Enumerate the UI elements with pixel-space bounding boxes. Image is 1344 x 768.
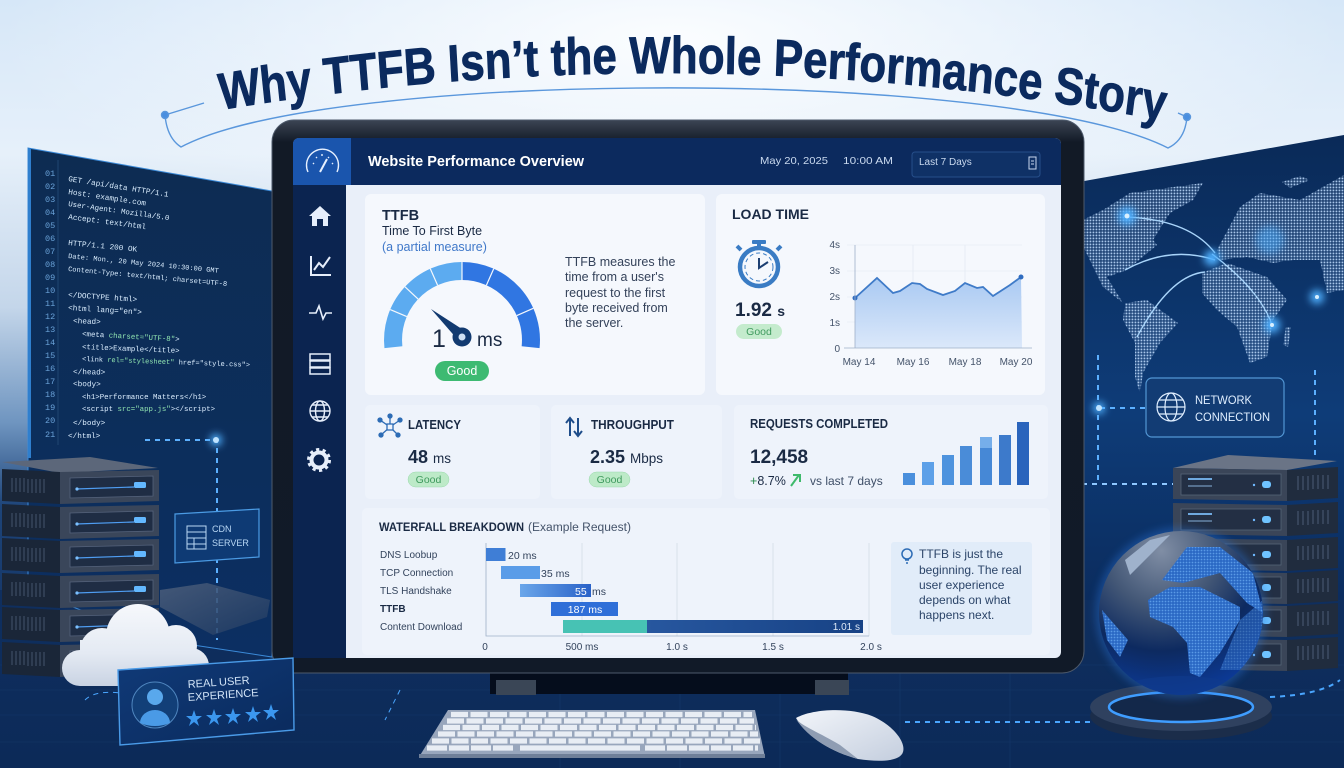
code text: User-Agent: Mozilla/5.0 — [68, 201, 170, 223]
line numbers: 19 — [45, 403, 55, 413]
line numbers: 17 — [45, 377, 55, 387]
floor with grid — [0, 590, 1344, 768]
panel: network map wall — [1073, 135, 1344, 600]
line numbers: 09 — [45, 273, 55, 283]
line numbers: 11 — [45, 299, 55, 309]
label: CDN server — [175, 509, 259, 563]
label: network connection: NETWORK — [1195, 393, 1252, 407]
area chart: 1s — [829, 318, 840, 329]
callout: depends on what — [919, 593, 1011, 607]
line numbers: 10 — [45, 286, 55, 296]
line numbers: 16 — [45, 364, 55, 374]
status pill — [435, 361, 489, 381]
area chart: 0 — [834, 344, 840, 355]
description: TTFB measures the — [565, 255, 675, 269]
area chart: 3s — [829, 266, 840, 277]
callout: user experience — [919, 578, 1005, 592]
code text: </body> — [73, 420, 106, 428]
card: real user experience: REAL USER — [187, 675, 250, 691]
icon: left server stack — [2, 457, 159, 677]
status pill — [589, 472, 630, 487]
status pill: Good — [597, 474, 623, 486]
code text: <script src="app.js"></script> — [82, 406, 216, 414]
panel: TTFB: Time To First Byte — [382, 224, 482, 238]
icon: up and down arrows — [566, 418, 582, 436]
line numbers: 18 — [45, 390, 55, 400]
card: real user experience — [118, 658, 294, 745]
area chart: May 20 — [1000, 357, 1033, 368]
row labels: TTFB — [380, 604, 406, 615]
line numbers: 12 — [45, 312, 55, 322]
line numbers: 05 — [45, 221, 55, 231]
date range selector: Last 7 Days — [919, 157, 972, 168]
network arcs — [1125, 217, 1272, 337]
panel: latency: 48 ms — [408, 447, 451, 467]
icon: mouse — [796, 710, 903, 761]
gauge — [390, 262, 533, 353]
line numbers: 02 — [45, 182, 55, 192]
panel: waterfall breakdown: WATERFALL BREAKDOWN — [379, 522, 524, 534]
callout — [891, 542, 1032, 635]
icon: network nodes — [378, 414, 402, 437]
glass platform — [160, 583, 270, 635]
waterfall chart: 2.0 s — [860, 642, 882, 653]
map glow points — [1118, 207, 1324, 333]
needle — [431, 309, 472, 346]
line numbers — [45, 169, 55, 440]
label: CDN server: CDN — [212, 524, 232, 534]
line numbers: 01 — [45, 169, 55, 179]
code text: <h1>Performance Matters</h1> — [82, 394, 207, 402]
icon: keyboard — [419, 710, 765, 758]
waterfall chart: 55 — [575, 586, 587, 598]
waterfall chart: 35 ms — [541, 568, 570, 580]
icon: globe — [1157, 393, 1185, 421]
dashed connection lines — [85, 355, 1340, 722]
status pill: Good — [447, 364, 477, 378]
icon: gear — [308, 450, 330, 470]
panel: throughput: THROUGHPUT — [591, 418, 674, 432]
area chart: May 18 — [949, 357, 982, 368]
title: Why TTFB Isn’t the Whole Performance Story — [216, 35, 1168, 129]
sidebar — [293, 185, 346, 658]
icon: server — [310, 354, 330, 374]
row labels: DNS Loobup — [380, 550, 438, 561]
connection glow nodes — [210, 402, 1105, 446]
icon: home — [309, 206, 331, 226]
gauge: ms — [477, 330, 502, 351]
area chart: 4s — [829, 240, 840, 251]
stars rating — [186, 704, 279, 726]
panel: requests completed: REQUESTS COMPLETED — [750, 417, 888, 431]
line numbers: 03 — [45, 195, 55, 205]
code text: <link rel="stylesheet" href="style.css"> — [82, 356, 250, 370]
code text: GET /api/data HTTP/1.1 — [68, 176, 169, 200]
waterfall chart: 0 — [482, 642, 488, 653]
icon: server list — [187, 526, 206, 549]
icon: pulse — [309, 306, 332, 319]
waterfall chart: ms — [592, 586, 606, 598]
label: CDN server: SERVER — [212, 538, 249, 548]
code text: <title>Example</title> — [82, 344, 180, 356]
code text: Accept: text/html — [68, 214, 147, 232]
bar chart — [903, 422, 1029, 485]
gauge: 1 — [432, 325, 446, 353]
panel: requests completed: 12,458 — [750, 447, 808, 468]
panel: load time — [716, 194, 1045, 395]
panel: throughput: 2.35 Mbps — [590, 447, 663, 467]
icon: light bulb — [902, 549, 912, 563]
waterfall chart: 1.01 s — [833, 622, 860, 633]
line numbers: 06 — [45, 234, 55, 244]
panel: waterfall breakdown: (Example Request) — [528, 522, 631, 534]
date range selector — [912, 152, 1040, 177]
icon: stopwatch — [737, 240, 781, 286]
icon: globe — [310, 401, 330, 421]
callout: happens next. — [919, 608, 994, 622]
header bar: May 20, 2025 — [760, 155, 828, 167]
panel: latency — [365, 405, 540, 499]
panel: TTFB — [365, 194, 705, 395]
title curve decoration — [162, 88, 1190, 148]
code text: </DOCTYPE html> — [68, 292, 138, 305]
status pill — [736, 324, 782, 339]
line numbers: 15 — [45, 351, 55, 361]
area chart: 2s — [829, 292, 840, 303]
description: request to the first — [565, 286, 666, 300]
code text: <head> — [73, 318, 101, 327]
line numbers: 21 — [45, 430, 55, 440]
world map dots — [1077, 175, 1344, 393]
waterfall chart — [482, 543, 882, 653]
icon: line chart — [311, 256, 331, 275]
line numbers: 08 — [45, 260, 55, 270]
panel: load time: LOAD TIME — [732, 206, 809, 222]
area chart: May 14 — [843, 357, 876, 368]
line numbers: 07 — [45, 247, 55, 257]
icon: gauge — [306, 149, 338, 172]
code text: <html lang="en"> — [68, 305, 142, 318]
label: network connection — [1146, 378, 1284, 437]
panel: load time: 1.92 s — [735, 300, 785, 321]
icon: cloud — [62, 604, 209, 686]
row labels — [380, 550, 462, 633]
panel: throughput — [551, 405, 722, 499]
icon: globe on base — [1090, 527, 1272, 740]
code text: </html> — [68, 433, 101, 441]
icon: green arrow — [791, 475, 800, 486]
monitor — [272, 120, 1084, 695]
code text: HTTP/1.1 200 OK — [68, 240, 138, 255]
card: real user experience: EXPERIENCE — [187, 687, 259, 704]
callout: beginning. The real — [919, 563, 1022, 577]
code text — [68, 176, 250, 441]
status pill: Good — [416, 474, 442, 486]
panel: code editor — [28, 148, 272, 657]
line numbers: 04 — [45, 208, 55, 218]
gauge badge — [293, 138, 351, 185]
line numbers: 14 — [45, 338, 55, 348]
description: time from a user's — [565, 270, 664, 284]
code text: </head> — [73, 369, 106, 378]
header bar: 10:00 AM — [843, 155, 893, 167]
row labels: TCP Connection — [380, 568, 453, 579]
waterfall chart: 500 ms — [566, 642, 598, 653]
panel: requests completed: vs last 7 days — [810, 474, 883, 488]
line numbers: 13 — [45, 325, 55, 335]
code text: <body> — [73, 381, 101, 389]
line numbers: 20 — [45, 416, 55, 426]
label: network connection: CONNECTION — [1195, 410, 1270, 424]
header bar — [293, 138, 1061, 185]
code text: Date: Mon., 20 May 2024 10:30:00 GMT — [68, 253, 219, 276]
code text: Host: example.com — [68, 189, 147, 209]
panel: requests completed — [734, 405, 1048, 499]
panel: TTFB: (a partial measure) — [382, 240, 487, 254]
code text: <meta charset="UTF-8"> — [82, 331, 180, 344]
description: byte received from — [565, 301, 668, 315]
waterfall chart: 187 ms — [568, 604, 602, 616]
status pill — [408, 472, 449, 487]
panel: TTFB: TTFB — [382, 208, 419, 224]
row labels: TLS Handshake — [380, 586, 452, 597]
status pill: Good — [746, 326, 772, 338]
callout: TTFB is just the — [919, 547, 1003, 561]
header bar: Website Performance Overview — [368, 153, 584, 170]
description: the server. — [565, 316, 623, 330]
waterfall chart: 1.5 s — [762, 642, 784, 653]
panel: requests completed: +8.7% — [750, 474, 786, 488]
waterfall chart: 1.0 s — [666, 642, 688, 653]
area chart: May 16 — [897, 357, 930, 368]
icon: user avatar — [132, 682, 178, 728]
description — [565, 255, 675, 330]
area chart — [829, 240, 1033, 368]
panel: latency: LATENCY — [408, 418, 462, 432]
icon: right server stack — [1173, 455, 1338, 671]
panel: waterfall breakdown — [362, 508, 1050, 655]
waterfall chart: 20 ms — [508, 550, 537, 562]
code text: Content-Type: text/html; charset=UTF-8 — [68, 266, 227, 289]
row labels: Content Download — [380, 622, 462, 633]
